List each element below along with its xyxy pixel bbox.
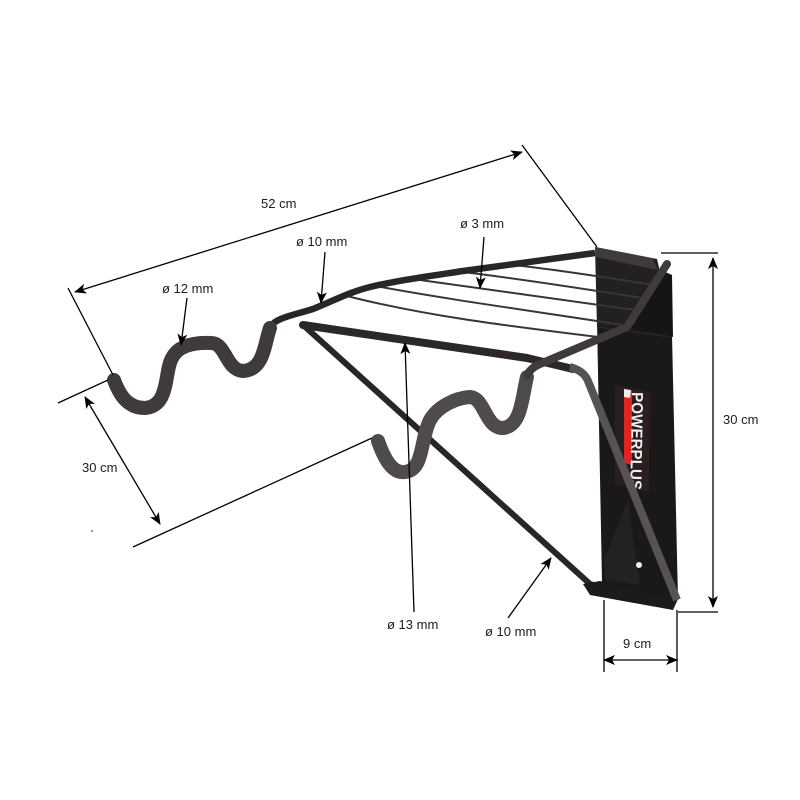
logo: Powerplus: POWERPLUS bbox=[626, 392, 645, 491]
callout: 3 mm wire bbox=[460, 216, 504, 288]
dimension: 30 cm right: 30 cm bbox=[723, 412, 758, 427]
callout: 10 mm brace: ø 10 mm bbox=[485, 624, 536, 639]
dimension: 30 cm right bbox=[661, 253, 758, 612]
callout: 10 mm top tube bbox=[296, 234, 347, 303]
top tube bbox=[270, 253, 595, 327]
dimension: 52 cm bbox=[68, 145, 597, 375]
mounting hole bbox=[636, 562, 642, 568]
callout: 10 mm top tube: ø 10 mm bbox=[296, 234, 347, 249]
dimension: 52 cm: 52 cm bbox=[261, 196, 296, 211]
callout: 13 mm tube bbox=[387, 343, 438, 632]
dimension: 30 cm left: 30 cm bbox=[82, 460, 117, 475]
stray speck bbox=[91, 530, 93, 532]
callout: 12 mm hook bbox=[162, 281, 213, 345]
upper wire shelf rungs bbox=[343, 265, 653, 337]
dimension: 9 cm bbox=[604, 600, 677, 672]
diagonal strut and bottom bar bbox=[302, 324, 673, 607]
front cross tube bbox=[303, 325, 573, 369]
front rubber hook bbox=[114, 328, 270, 408]
callout: 3 mm wire: ø 3 mm bbox=[460, 216, 504, 231]
rear rubber hook bbox=[378, 377, 527, 472]
diagonal brace tube bbox=[570, 367, 677, 600]
bottom plate flange bbox=[583, 581, 678, 610]
right upper tube bbox=[527, 264, 667, 376]
callout: 10 mm brace bbox=[485, 558, 551, 639]
callout: 13 mm tube: ø 13 mm bbox=[387, 617, 438, 632]
dimension: 9 cm: 9 cm bbox=[623, 636, 651, 651]
wall plate bbox=[595, 247, 678, 600]
callout: 12 mm hook: ø 12 mm bbox=[162, 281, 213, 296]
dimension: 30 cm left bbox=[58, 380, 372, 547]
logo: Powerplus bbox=[615, 385, 650, 492]
